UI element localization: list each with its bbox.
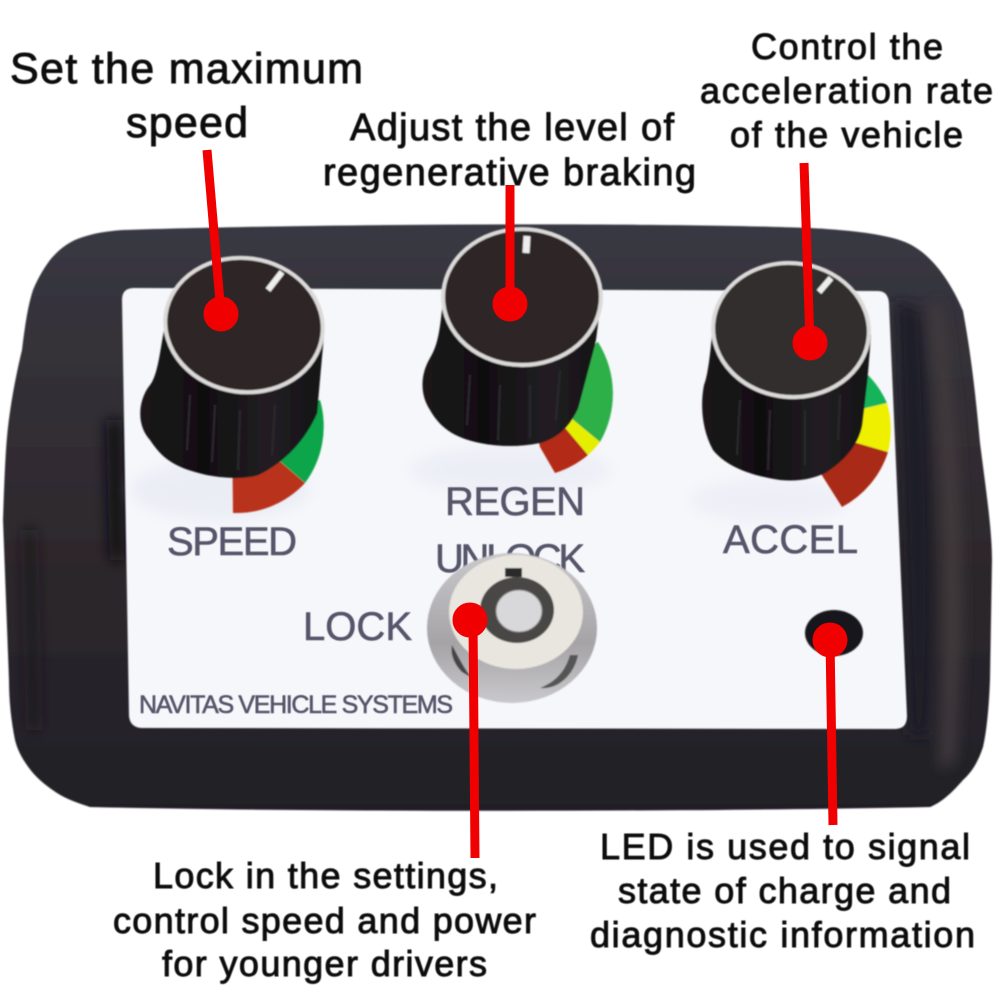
- callout: regenerative braking: [323, 107, 696, 194]
- pointer: LED: [813, 623, 847, 825]
- LED indicator: [805, 610, 863, 656]
- callout: lock: Lock in the settings,: [153, 855, 498, 896]
- callout: regenerative braking: Adjust the level of: [350, 107, 674, 149]
- speed knob: [140, 248, 332, 478]
- pointer: maximum speed: [204, 150, 238, 331]
- accel knob: [702, 256, 875, 481]
- bezel side shading: [25, 300, 962, 770]
- callout: LED: state of charge and: [618, 870, 951, 911]
- regen knob: [422, 229, 601, 446]
- callout: regenerative braking: regenerative braking: [323, 152, 696, 194]
- callout: maximum speed: Set the maximum: [10, 45, 363, 93]
- dial labels: UNLOCK: [435, 537, 585, 581]
- callout: maximum speed: [10, 45, 363, 147]
- white faceplate: [122, 288, 907, 729]
- callout: lock: for younger drivers: [162, 943, 487, 984]
- speed dial arc: [232, 400, 324, 513]
- callout: lock: [113, 855, 536, 984]
- dial labels: ACCEL: [723, 518, 858, 562]
- faceplate shading: [130, 445, 850, 522]
- dial labels: LOCK: [303, 605, 412, 649]
- callout: LED: LED is used to signal: [600, 826, 970, 867]
- key lock: [427, 553, 597, 703]
- dial labels: REGEN: [445, 480, 585, 524]
- pointer: lock: [453, 603, 487, 858]
- accel dial arc: [795, 375, 891, 507]
- callout: LED: [590, 826, 975, 955]
- callout: maximum speed: speed: [126, 99, 248, 147]
- pointer: acceleration: [793, 163, 827, 360]
- dial labels: SPEED: [167, 520, 297, 564]
- callout: acceleration: [700, 26, 993, 155]
- callout: LED: diagnostic information: [590, 914, 975, 955]
- dial labels: NAVITAS VEHICLE SYSTEMS: [139, 691, 453, 719]
- callout: acceleration: acceleration rate: [700, 70, 993, 111]
- callout: acceleration: of the vehicle: [730, 114, 963, 155]
- dial labels: [139, 480, 858, 719]
- pointer: regenerative braking: [493, 185, 527, 321]
- callout: acceleration: Control the: [751, 26, 943, 67]
- regen dial arc: [525, 342, 613, 473]
- callout: lock: control speed and power: [113, 900, 536, 941]
- controller bezel: [3, 224, 992, 811]
